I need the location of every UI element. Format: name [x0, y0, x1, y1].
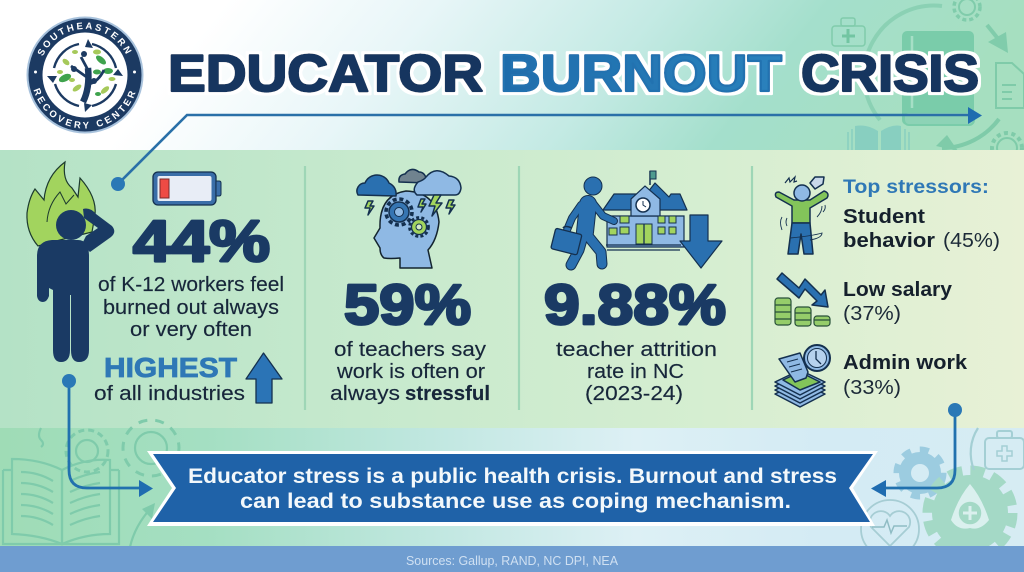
stat: 44%: 44% — [133, 209, 270, 274]
text: 44% description: or very often — [130, 319, 252, 341]
dividers — [305, 166, 752, 410]
text: attrition description: rate in NC — [587, 361, 684, 383]
icon: stressed student — [775, 177, 828, 254]
banner — [147, 451, 878, 526]
text: attrition description: teacher attrition — [556, 339, 717, 361]
panel: 44 percent burned out — [27, 162, 290, 405]
icon: falling salary — [775, 273, 830, 326]
icon: person with flames — [27, 162, 114, 362]
text: 59% description: stressful — [405, 383, 490, 405]
text: 59% description: always — [330, 383, 400, 405]
bottom left decorative book and gears — [3, 420, 179, 547]
text: admin work: (33%) — [843, 377, 901, 399]
stats band background — [0, 150, 1024, 428]
header decorative icons — [832, 0, 1024, 163]
text: student behavior: Student — [843, 206, 925, 228]
panel: top stressors — [775, 176, 1000, 407]
heading: top stressors: Top stressors: — [843, 176, 989, 198]
panel: 9.88 percent attrition — [544, 171, 726, 405]
text: of all industries: of all industries — [94, 383, 245, 405]
connector arrow: right — [871, 403, 962, 497]
text: 44% description: of K-12 workers feel — [98, 274, 284, 296]
bottom band background — [0, 428, 1024, 547]
text: 59% description: of teachers say — [334, 339, 486, 361]
title: EDUCATOR — [168, 45, 483, 103]
logo: Southeastern Recovery Center: SOUTHEASTERN — [38, 22, 132, 56]
connector arrow: left — [62, 374, 153, 497]
icon: stressed head — [357, 169, 461, 268]
text: low salary: Low salary — [843, 279, 953, 301]
text: 59% description: work is often or — [336, 361, 485, 383]
panel: 59 percent stressed — [330, 169, 492, 405]
icon: up arrow — [246, 353, 282, 403]
header background — [0, 0, 1024, 151]
text: student behavior: (45%) — [943, 230, 1000, 252]
bottom right decorative gears and medical icons — [861, 428, 1024, 558]
icon: admin paperwork — [775, 345, 830, 407]
stat: 59%: 59% — [344, 273, 471, 337]
title — [168, 45, 979, 103]
icon: person leaving school — [551, 171, 722, 268]
icon: low battery — [153, 172, 221, 205]
text: student behavior: behavior — [843, 230, 935, 252]
connector arrow: top — [111, 107, 982, 191]
sources: Sources: Gallup, RAND, NC DPI, NEA — [406, 553, 618, 568]
stat: 9.88%: 9.88% — [544, 273, 726, 337]
logo: Southeastern Recovery Center: RECOVERY CENTER — [34, 88, 136, 128]
text: 44% description: burned out always — [103, 297, 279, 319]
logo: Southeastern Recovery Center — [26, 16, 144, 134]
title: BURNOUT — [500, 45, 782, 103]
banner text: can lead to substance use as coping mechanism. — [240, 490, 791, 513]
text: low salary: (37%) — [843, 303, 901, 325]
footer bar — [0, 546, 1024, 572]
text: attrition description: (2023-24) — [585, 383, 683, 405]
banner text: Educator stress is a public health crisis. Burnout and stress — [188, 465, 837, 488]
text: admin work: Admin work — [843, 352, 968, 374]
highlight: highest: HIGHEST — [104, 352, 237, 383]
title: CRISIS — [801, 45, 979, 103]
